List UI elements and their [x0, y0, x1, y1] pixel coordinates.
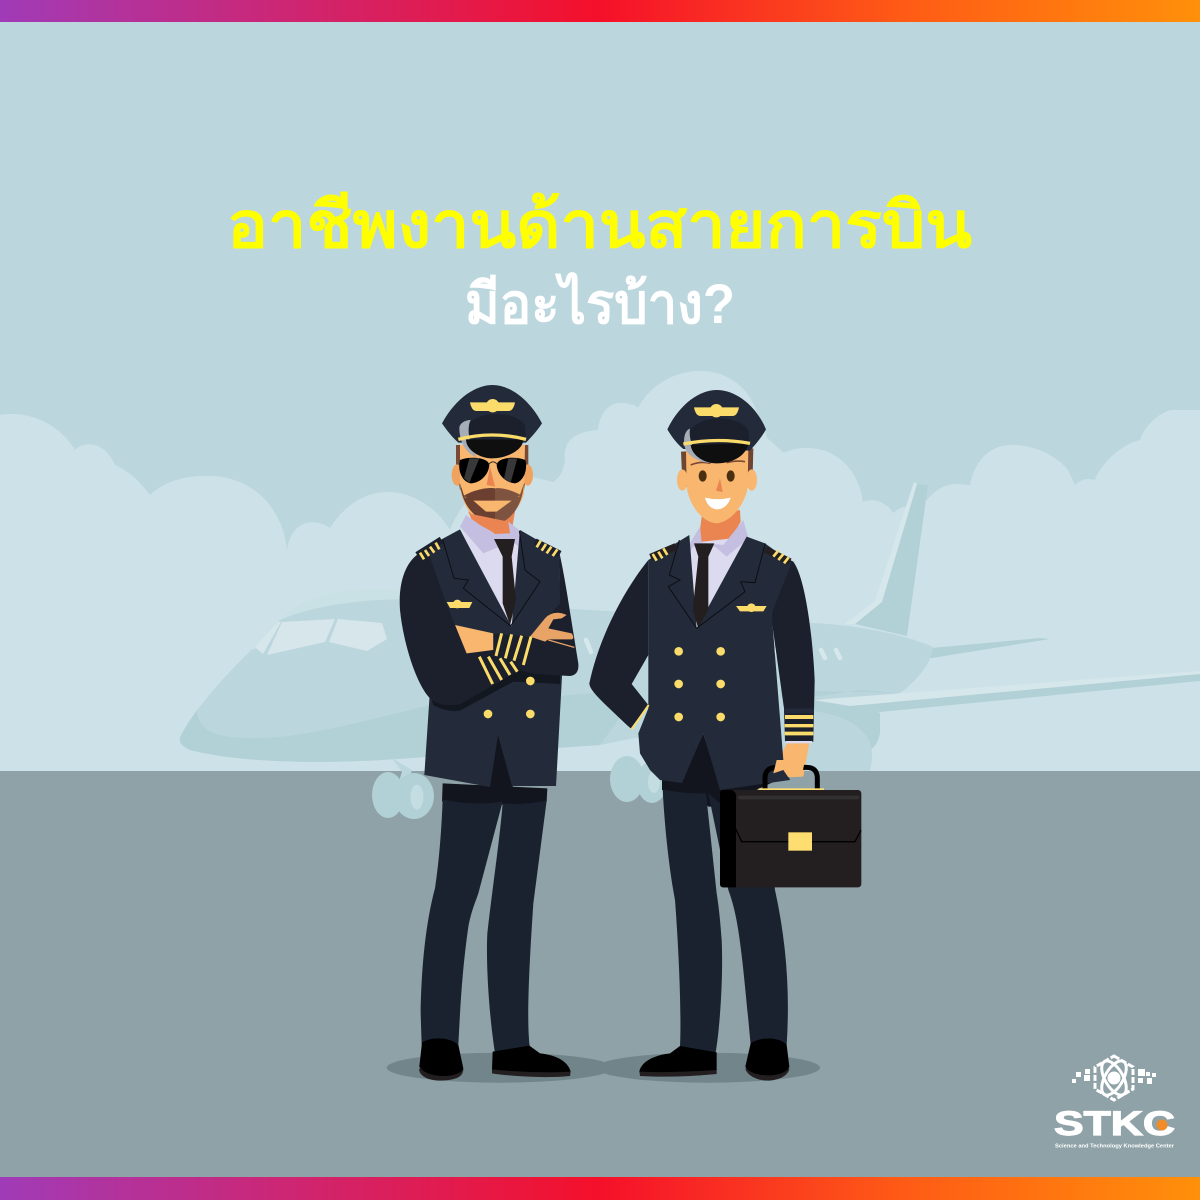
briefcase dark side — [720, 790, 736, 887]
neck — [698, 510, 741, 547]
briefcase body — [720, 790, 861, 887]
face — [686, 448, 748, 523]
collar — [683, 520, 748, 557]
ears — [452, 464, 533, 486]
ears — [677, 469, 757, 491]
ground shadows — [387, 1053, 820, 1083]
cap — [442, 385, 542, 458]
collar — [460, 515, 526, 553]
title line 2: มีอะไรบ้าง? — [465, 271, 735, 335]
left arm — [589, 560, 649, 729]
bottom gradient bar — [0, 1177, 1200, 1200]
tie — [693, 543, 714, 628]
briefcase seam — [738, 796, 859, 799]
horizontal stabilizer — [910, 638, 1050, 658]
briefcase handle — [765, 767, 817, 789]
epaulette stripes — [651, 547, 790, 563]
fuselage — [180, 599, 933, 762]
hand left — [455, 625, 493, 653]
hand right — [530, 613, 573, 642]
finger line — [548, 640, 574, 647]
crossed arms — [400, 548, 578, 711]
tail fin — [845, 482, 928, 636]
jacket torso — [420, 529, 562, 787]
jacket buttons — [484, 677, 535, 718]
tie — [494, 539, 516, 625]
title line 1: อาชีพงานด้านสายการบิน — [227, 189, 972, 261]
fuselage underside shade — [180, 690, 640, 762]
STKC logo — [1054, 1056, 1175, 1150]
pilot 2 upper body — [589, 390, 815, 793]
orange dot — [1156, 1120, 1168, 1130]
epaulette stripes — [417, 540, 560, 559]
inner coat opening — [680, 733, 722, 793]
wing and engine — [770, 671, 1200, 780]
neck — [468, 512, 515, 540]
eyes — [699, 470, 735, 482]
inner coat opening — [488, 733, 513, 788]
clouds — [0, 371, 1200, 772]
pilot 1 upper body — [400, 385, 578, 788]
atom icon — [1095, 1056, 1133, 1100]
nose — [487, 467, 495, 487]
tagline: Science and Technology Knowledge Center — [1055, 1144, 1175, 1150]
shirt — [688, 537, 747, 628]
ground — [0, 771, 1200, 1177]
jacket buttons — [674, 647, 725, 721]
airplane — [180, 482, 1200, 780]
beard — [460, 483, 524, 525]
top gradient bar — [0, 0, 1200, 22]
face — [460, 445, 525, 525]
briefcase — [720, 760, 861, 887]
briefcase top plate — [759, 788, 824, 792]
right shoe — [745, 1039, 789, 1081]
cuff stripes — [479, 633, 531, 684]
right hand — [773, 743, 809, 777]
chest wings badge — [447, 600, 472, 608]
title — [227, 189, 972, 335]
wordmark: STKC — [1054, 1105, 1175, 1143]
pilot 1 legs — [419, 783, 571, 1081]
briefcase clasp — [788, 832, 812, 851]
chest wings badge — [736, 603, 767, 612]
nose — [716, 478, 723, 492]
right arm — [772, 560, 815, 743]
neck front — [468, 513, 510, 534]
briefcase flap — [736, 829, 861, 842]
shirt — [462, 530, 520, 627]
pixel squares — [1072, 1069, 1156, 1084]
pilot 2 legs — [639, 777, 789, 1081]
eyebrows — [691, 461, 745, 465]
jacket torso — [638, 535, 792, 790]
lapels — [443, 531, 540, 626]
cap — [667, 390, 766, 463]
cockpit hump — [280, 589, 500, 625]
cabin windows — [586, 640, 840, 658]
cockpit windows — [252, 619, 387, 655]
left shoe — [639, 1046, 717, 1077]
left shoe — [419, 1038, 463, 1081]
landing gear — [372, 756, 667, 819]
hair — [456, 445, 528, 490]
right shoe — [492, 1046, 571, 1077]
smile — [705, 498, 731, 509]
hand on handle — [773, 760, 805, 777]
lapels — [668, 540, 765, 628]
sunglasses — [459, 458, 526, 483]
hair — [681, 448, 753, 487]
